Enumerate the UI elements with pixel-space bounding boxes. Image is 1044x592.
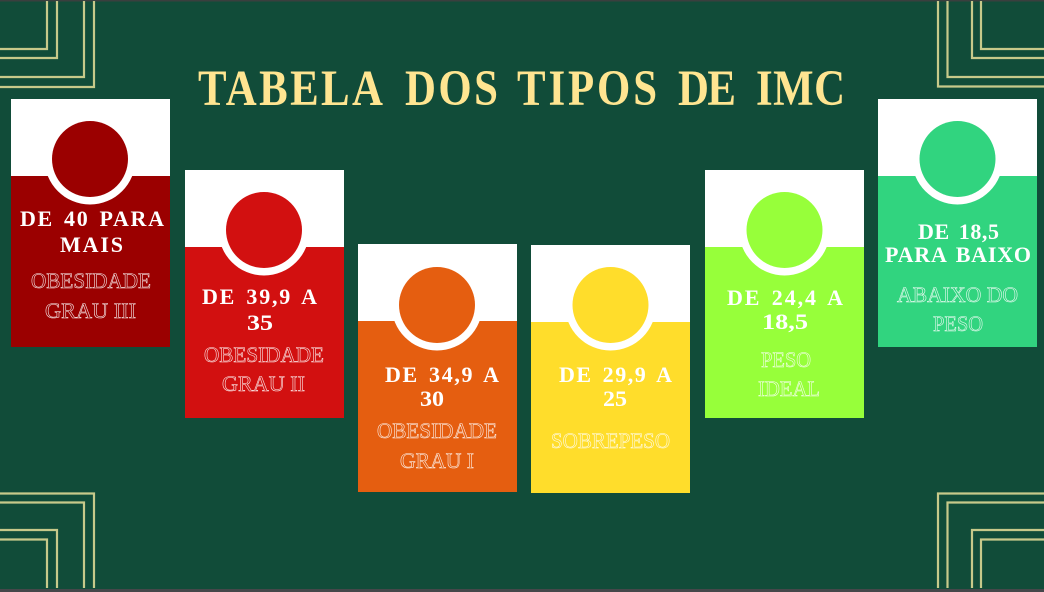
category text: PESO — [761, 347, 811, 372]
category text: IDEAL — [758, 376, 820, 401]
category text: GRAU III — [45, 298, 136, 323]
category text: OBESIDADE — [377, 418, 497, 443]
title — [198, 61, 845, 117]
corner ornament: top left — [0, 1, 94, 87]
icon: circle — [399, 267, 475, 343]
category text: OBESIDADE — [31, 268, 151, 293]
category text: GRAU II — [222, 371, 305, 396]
panel: obesidade grau II — [185, 170, 344, 418]
title: DE — [678, 61, 736, 117]
panel: abaixo do peso — [878, 99, 1037, 347]
range text: PARA BAIXO — [885, 242, 1031, 267]
corner ornament: top right — [938, 1, 1044, 86]
range text: 35 — [247, 310, 273, 335]
range text: DE 18,5 — [918, 219, 999, 244]
panel: obesidade grau III — [11, 99, 170, 347]
range text: DE 34,9 A — [385, 362, 499, 387]
panel: sobrepeso — [531, 245, 690, 493]
category text: OBESIDADE — [204, 342, 324, 367]
title: DOS — [405, 61, 498, 117]
icon: circle — [572, 267, 648, 343]
range text: MAIS — [60, 232, 123, 257]
category text: PESO — [933, 311, 983, 336]
icon: circle — [920, 121, 996, 197]
panel: obesidade grau I — [358, 244, 517, 492]
range text: DE 24,4 A — [727, 285, 843, 310]
title: IMC — [756, 61, 845, 117]
range text: 25 — [603, 386, 627, 411]
title: TIPOS — [517, 61, 657, 117]
icon: circle — [52, 121, 128, 197]
category text: ABAIXO DO — [897, 282, 1018, 307]
range text: DE 40 PARA — [20, 206, 164, 231]
range text: DE 29,9 A — [559, 362, 672, 387]
panel: peso ideal — [705, 170, 864, 418]
range text: 30 — [420, 386, 444, 411]
corner ornament: bottom right — [938, 494, 1044, 588]
range text: DE 39,9 A — [202, 284, 317, 309]
icon: circle — [226, 192, 302, 268]
category text: GRAU I — [400, 448, 474, 473]
category text: SOBREPESO — [551, 428, 670, 453]
corner ornament: bottom left — [0, 494, 94, 588]
title: TABELA — [198, 61, 383, 117]
icon: circle — [746, 192, 822, 268]
range text: 18,5 — [762, 309, 808, 334]
